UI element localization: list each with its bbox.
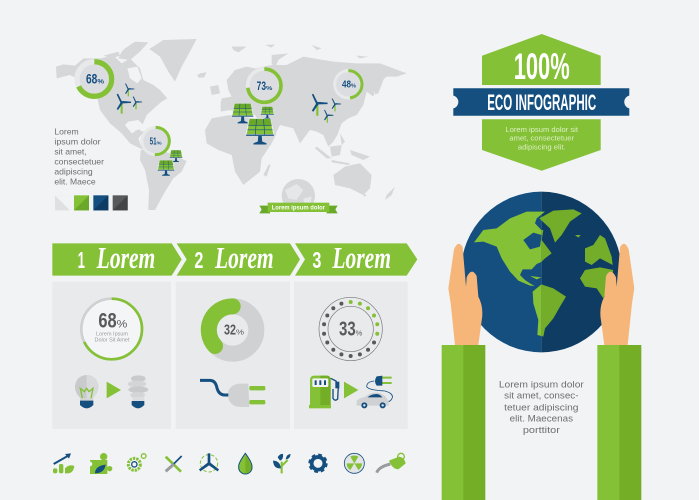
- steps section: [52, 241, 417, 429]
- icon: water drop: [239, 453, 252, 474]
- wind turbines: north america: [117, 83, 142, 114]
- hands caption text: porttitor: [523, 425, 560, 435]
- step arrow 2: Lorem: [214, 241, 274, 275]
- hands caption text: tetuer adipiscing: [504, 402, 578, 412]
- donut: 73%: [248, 69, 281, 102]
- ribbon: lorem ipsum dolor: [259, 203, 338, 213]
- map description text: adipiscing: [54, 166, 93, 176]
- icon: fuel pump: [309, 376, 339, 408]
- map description text: elit. Maece: [54, 176, 96, 186]
- icon: incandescent bulb: [75, 375, 98, 408]
- badge text: adipiscing elit.: [518, 142, 566, 151]
- globe held in hands: [442, 192, 641, 500]
- ring chart: 68%: Lorem Ipsum: [96, 332, 129, 338]
- donut: 48%: [335, 71, 362, 98]
- map description text: sit amet,: [54, 146, 87, 156]
- step arrow 2: 2: [194, 247, 203, 273]
- ribbon: lorem ipsum dolor: Lorem ipsum dolor: [272, 204, 325, 211]
- hands caption text: sit amet, consec-: [504, 391, 578, 401]
- hands caption text: Lorem ipsum dolor: [499, 379, 584, 389]
- donut: 68%: [77, 62, 112, 96]
- hands caption text: [499, 379, 584, 435]
- panel: step 2: [176, 282, 290, 429]
- badge text: amet, consectetuer: [509, 134, 574, 143]
- arrow: bulb to cfl: [107, 382, 121, 398]
- left sleeve: [442, 345, 485, 500]
- donut chart: 32%: [209, 306, 256, 354]
- small globe continents: [285, 184, 312, 210]
- solar panels: africa: [232, 104, 274, 144]
- icon: growth chart: [53, 453, 74, 473]
- step arrow 3: 3: [312, 247, 321, 273]
- step arrow 3: [295, 241, 417, 276]
- badge top hexagon: [482, 34, 601, 85]
- badge: eco infographic: [453, 34, 629, 171]
- map description text: Lorem: [54, 126, 79, 136]
- left hand: [448, 244, 482, 345]
- globe: [461, 192, 622, 352]
- badge bottom hexagon: [482, 119, 601, 171]
- panel: step 3: [294, 282, 408, 429]
- donut chart: 32%: %: [236, 327, 244, 336]
- donut: 73%: %: [266, 86, 272, 92]
- donut: 51%: [142, 127, 169, 155]
- badge text: Lorem ipsum dolor sit: [505, 125, 579, 134]
- map description text: consectetuer: [54, 156, 104, 166]
- panel: world map overlays: [54, 62, 362, 213]
- badge banner: [453, 88, 629, 116]
- donut: 68%: %: [97, 79, 104, 86]
- panel: step 1: [52, 282, 171, 429]
- icon row: [53, 453, 406, 474]
- world map: americas and greenland: [56, 39, 207, 210]
- donut: 51%: 51: [150, 136, 157, 147]
- step arrow 2: [177, 241, 300, 276]
- donut: 51%: %: [157, 140, 162, 146]
- badge heading: 100%: 100%: [514, 46, 570, 87]
- ring chart: 68%: %: [117, 318, 128, 330]
- icon: electric car and plug: [357, 376, 392, 408]
- donut: 48%: %: [351, 84, 356, 90]
- world map: europe, asia, africa and oceania: [200, 44, 407, 200]
- hands caption text: elit. Maecenas: [510, 414, 573, 424]
- map description text: ipsum dolor: [54, 136, 101, 146]
- donut: 68%: 68: [86, 72, 98, 87]
- step arrow 1: Lorem: [96, 241, 155, 275]
- ring chart: 68%: Dolor Sit Amet: [94, 338, 130, 344]
- icon: plant: [273, 454, 291, 473]
- ring chart: 68%: [81, 299, 142, 359]
- dotted gauge: 33%: [319, 297, 382, 361]
- icon: turbine ring: [199, 453, 219, 472]
- ring chart: 68%: 68: [98, 309, 117, 332]
- donut: 48%: 48: [342, 80, 351, 91]
- icon: power plug: [200, 380, 265, 407]
- dotted gauge: 33%: %: [356, 329, 363, 338]
- colour swatches: [55, 195, 128, 210]
- icon: gears: [128, 454, 146, 470]
- right sleeve: [597, 345, 641, 500]
- step arrow 1: [52, 241, 182, 276]
- icon: watering can: [377, 453, 406, 473]
- map description text: [54, 126, 104, 186]
- badge text: [505, 125, 579, 151]
- badge heading: eco infographic: ECO INFOGRAPHIC: [487, 90, 596, 115]
- donut chart: 32%: 32: [224, 321, 236, 338]
- icon: cfl bulb: [128, 375, 148, 408]
- icon: radiation: [344, 453, 364, 473]
- donut: 73%: 73: [257, 79, 266, 93]
- icon: puzzle leaf: [88, 453, 112, 474]
- right hand: [600, 244, 634, 345]
- small grey globe: [282, 179, 315, 212]
- arrow: pump to electric car: [344, 382, 358, 398]
- step arrow 3: Lorem: [332, 241, 391, 275]
- solar panels: south america: [158, 150, 182, 176]
- icon: tools: [166, 456, 182, 472]
- dotted gauge: 33%: 33: [339, 319, 356, 341]
- step arrow 1: 1: [78, 247, 85, 273]
- icon: cog: [310, 455, 326, 472]
- wind turbines: asia: [312, 94, 341, 123]
